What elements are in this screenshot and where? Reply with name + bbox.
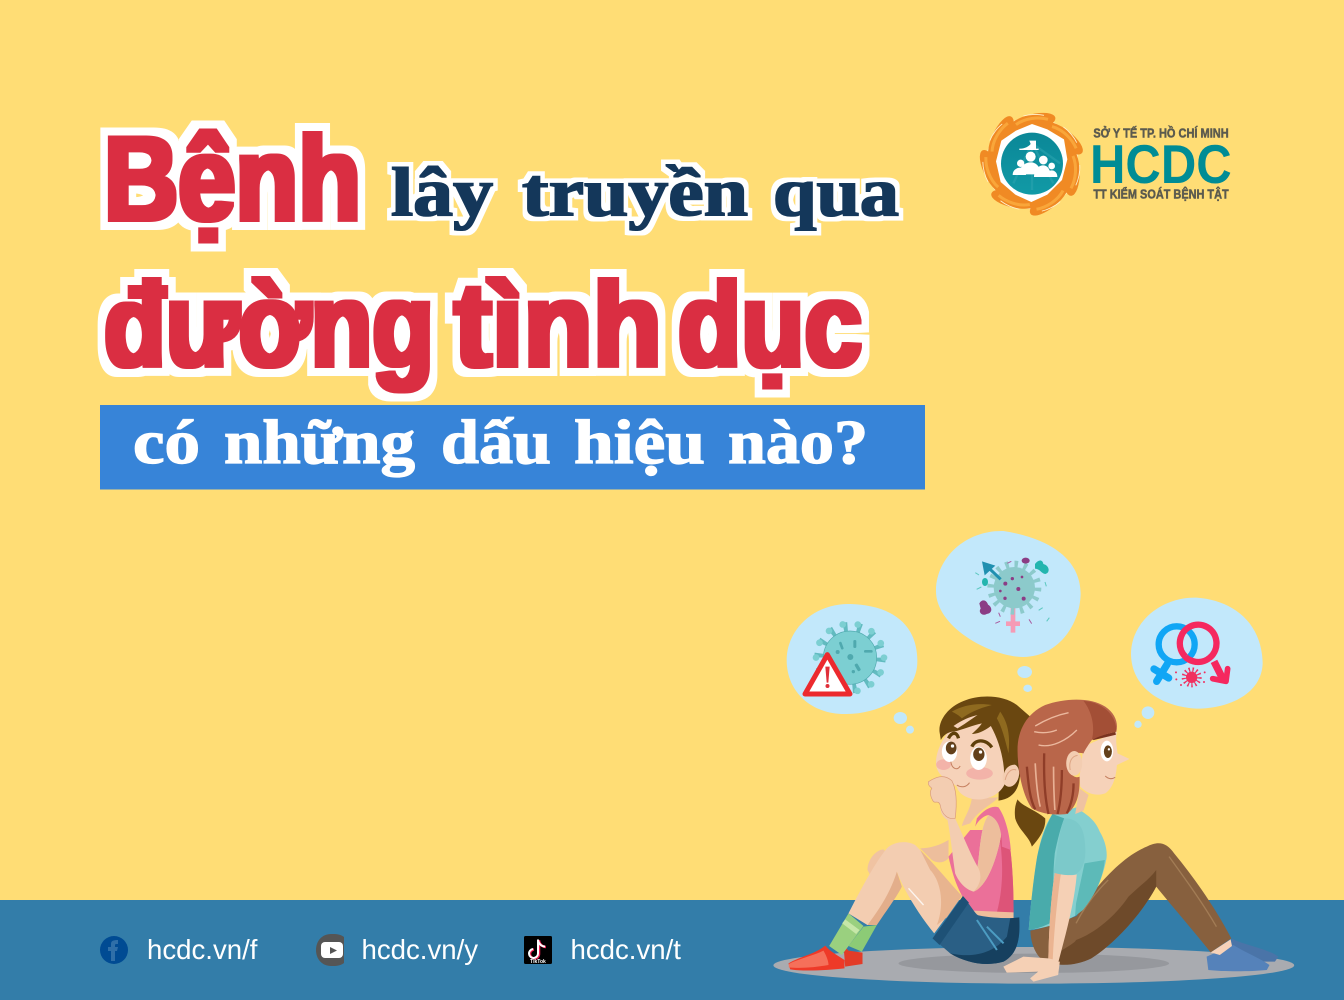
- bubble: female infection: [936, 531, 1081, 692]
- title: đường tình dục: đường: [104, 258, 434, 392]
- shoes: [1230, 938, 1278, 962]
- subtitle banner: [100, 405, 925, 490]
- subtitle banner: những: [224, 409, 415, 477]
- title: lây truyền qua: [391, 154, 899, 232]
- waist: [973, 911, 1014, 918]
- neck: [962, 797, 999, 826]
- title: đường tình dục: dục: [678, 258, 862, 392]
- subtitle banner: hiệu: [574, 409, 705, 477]
- icon: germ: [1175, 670, 1206, 686]
- floor shadow: [773, 947, 1294, 984]
- lower body: [788, 830, 1019, 970]
- girl with auburn hair: [1003, 700, 1278, 982]
- far shoe: [844, 945, 863, 967]
- far sock: [849, 925, 877, 952]
- logo text: TT kiểm soát bệnh tật: TT KIỂM SOÁT BỆNH TẬT: [1093, 186, 1229, 201]
- title: lây truyền qua: qua: [773, 154, 899, 232]
- thought bubbles: [787, 531, 1263, 734]
- far arm: [920, 840, 949, 862]
- hand on knee: [868, 849, 887, 875]
- shorts: [933, 896, 1019, 964]
- social: youtube: [316, 934, 478, 966]
- front hair: [939, 696, 1030, 773]
- ponytail: [1015, 799, 1045, 847]
- subtitle banner: có: [133, 409, 200, 477]
- social: youtube: hcdc.vn/y: [362, 934, 478, 965]
- upper arm and hand: [928, 696, 1045, 892]
- icon: female sign: [1154, 626, 1195, 681]
- near shoe: [788, 946, 845, 970]
- social: facebook: hcdc.vn/f: [147, 934, 258, 965]
- title: lây truyền qua: lây: [391, 154, 493, 232]
- face: [936, 723, 1007, 800]
- HCDC logo: [973, 109, 1232, 223]
- girl with brown hair: [788, 696, 1045, 970]
- logo text: HCDC: HCDC: [1090, 133, 1232, 195]
- title: Bệnh: Bệnh: [104, 112, 361, 246]
- icon: facebook: [100, 936, 128, 964]
- icon: male sign: [1180, 625, 1228, 681]
- sleeve: [1053, 818, 1085, 875]
- far leg: [849, 857, 902, 925]
- social: tiktok: hcdc.vn/t: [570, 934, 681, 965]
- shirt: [1029, 807, 1107, 930]
- pink top lower: [949, 830, 1014, 913]
- ear: [1000, 762, 1022, 789]
- logo text: Sở Y tế: SỞ Y TẾ TP. HỒ CHÍ MINH: [1093, 125, 1229, 140]
- subtitle banner: nào?: [728, 409, 868, 477]
- face: [1080, 732, 1130, 795]
- near leg: [849, 842, 962, 933]
- icon: tiktok: [524, 936, 552, 965]
- eyes: [942, 741, 987, 770]
- logo emblem: [973, 109, 1091, 223]
- top strap: [975, 807, 1011, 850]
- title: đường tình dục: tình: [454, 258, 662, 392]
- near sock: [829, 913, 864, 955]
- head: [1018, 700, 1130, 814]
- neck: [1075, 788, 1089, 814]
- title: lây truyền qua: truyền: [522, 154, 748, 232]
- subtitle banner: dấu: [441, 409, 551, 477]
- icon: youtube: [316, 934, 344, 966]
- bubble: sex symbols: [1131, 598, 1263, 728]
- icon: tiktok: TikTok: [530, 959, 546, 965]
- icon: warning triangle: [805, 655, 850, 694]
- footer band: [0, 900, 1344, 1000]
- arm and hand: [1003, 872, 1077, 982]
- icon: arrow: [982, 561, 1001, 579]
- back hair: [999, 710, 1030, 801]
- ear: [1066, 751, 1082, 776]
- icon: female symbol: [1006, 607, 1020, 633]
- pants: [1030, 843, 1231, 965]
- blush: [966, 767, 993, 780]
- bubble: virus warning: [787, 604, 917, 734]
- title: đường tình dục: [104, 258, 862, 392]
- hair: [1018, 700, 1117, 814]
- illustration: two girls sitting back to back: [773, 696, 1294, 984]
- hand outline: [928, 777, 956, 819]
